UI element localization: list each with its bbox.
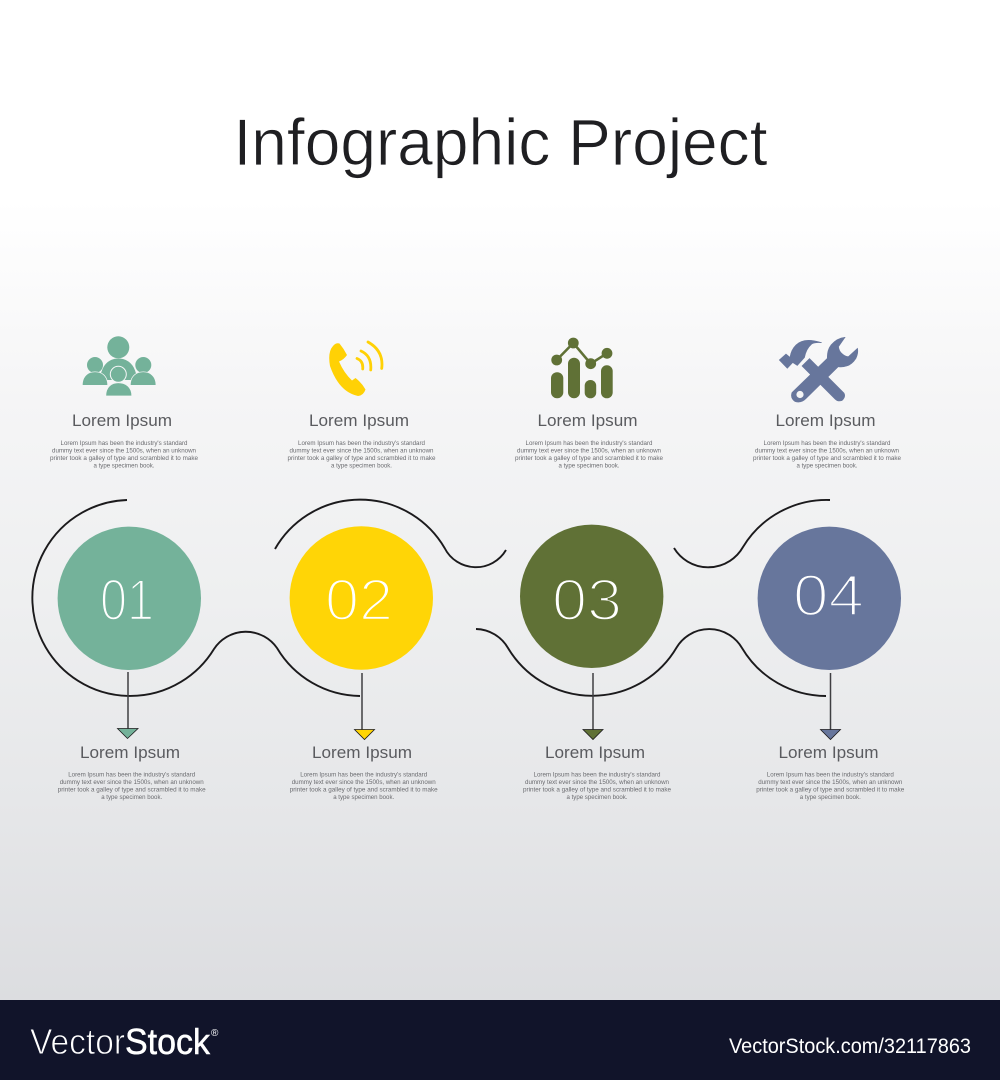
heading and text: top block 4 <box>753 411 901 469</box>
circle 04 <box>758 527 901 670</box>
heading and text: top block 3: a type specimen book. <box>558 462 620 469</box>
heading and text: bottom block 1: printer took a galley of type and scrambled it to make <box>58 787 206 794</box>
heading and text: bottom block 3: Lorem Ipsum <box>545 743 645 762</box>
heading and text: bottom block 2: Lorem Ipsum has been the industry's standard <box>300 771 427 778</box>
arrow 3 <box>583 673 603 740</box>
heading and text: bottom block 2: printer took a galley of type and scrambled it to make <box>290 787 438 794</box>
heading and text: bottom block 3: a type specimen book. <box>566 794 628 801</box>
heading and text: bottom block 4: a type specimen book. <box>800 794 861 801</box>
heading and text: top block 1: printer took a galley of type and scrambled it to make <box>50 455 198 462</box>
heading and text: bottom block 3 <box>523 743 671 801</box>
circle 01 <box>58 527 201 670</box>
heading and text: bottom block 4: printer took a galley of type and scrambled it to make <box>756 787 905 794</box>
circle 04: 04 <box>793 564 864 628</box>
icon: people group <box>82 336 156 396</box>
heading and text: bottom block 4 <box>756 743 905 801</box>
curve: over circle 2 <box>275 500 506 567</box>
heading and text: top block 2: Lorem Ipsum <box>309 411 409 430</box>
circle 03 <box>520 525 663 668</box>
heading and text: bottom block 3: Lorem Ipsum has been the industry's standard <box>534 771 661 778</box>
heading and text: top block 4: printer took a galley of type and scrambled it to make <box>753 455 901 462</box>
heading and text: bottom block 1: dummy text ever since the 1500s, when an unknown <box>60 779 204 786</box>
circle 01: 01 <box>100 568 154 633</box>
heading and text: top block 4: dummy text ever since the 1500s, when an unknown <box>755 447 899 454</box>
heading and text: top block 2: printer took a galley of type and scrambled it to make <box>288 455 436 462</box>
curve: around circle 1 to circle 2 bottom <box>32 500 360 696</box>
arrow 1 <box>118 672 138 738</box>
arrow 2 <box>354 673 374 740</box>
heading and text: top block 3: Lorem Ipsum has been the industry's standard <box>526 440 653 447</box>
icon: phone <box>329 342 382 396</box>
heading and text: top block 1: dummy text ever since the 1500s, when an unknown <box>52 447 196 454</box>
heading and text: top block 2: dummy text ever since the 1500s, when an unknown <box>290 447 434 454</box>
heading and text: bottom block 3: printer took a galley of type and scrambled it to make <box>523 787 671 794</box>
title: Infographic Project <box>234 105 768 179</box>
circle 03: 03 <box>552 568 622 633</box>
heading and text: top block 3: printer took a galley of type and scrambled it to make <box>515 455 663 462</box>
heading and text: bottom block 4: Lorem Ipsum <box>778 743 878 762</box>
footer logo: ® <box>211 1028 219 1039</box>
heading and text: top block 4: a type specimen book. <box>796 462 858 469</box>
heading and text: top block 2 <box>288 411 436 469</box>
circle 02: 02 <box>325 568 393 633</box>
heading and text: bottom block 2: Lorem Ipsum <box>312 743 412 762</box>
footer image id: VectorStock.com/32117863 <box>729 1035 971 1058</box>
icon: bar chart <box>551 338 613 398</box>
heading and text: bottom block 2: dummy text ever since the 1500s, when an unknown <box>292 779 436 786</box>
curve: over to circle 4 <box>674 500 830 567</box>
heading and text: top block 4: Lorem Ipsum <box>776 411 876 430</box>
heading and text: bottom block 3: dummy text ever since the 1500s, when an unknown <box>525 779 669 786</box>
curve: under circle 3 to circle 4 bottom <box>476 629 826 696</box>
heading and text: bottom block 1: a type specimen book. <box>101 794 162 801</box>
footer bar <box>0 1000 1000 1080</box>
footer logo <box>30 1021 219 1062</box>
footer logo: Stock <box>125 1021 211 1062</box>
heading and text: top block 1 <box>50 411 198 469</box>
heading and text: top block 2: a type specimen book. <box>331 462 392 469</box>
heading and text: top block 1: a type specimen book. <box>94 462 155 469</box>
heading and text: top block 3: Lorem Ipsum <box>538 411 638 430</box>
footer logo: Vector <box>30 1021 125 1062</box>
circle 02 <box>290 526 433 670</box>
heading and text: bottom block 1 <box>58 743 206 801</box>
arrow 4 <box>820 673 840 740</box>
heading and text: top block 1: Lorem Ipsum has been the industry's standard <box>60 440 188 447</box>
icon: hammer and wrench <box>779 337 858 402</box>
heading and text: top block 2: Lorem Ipsum has been the industry's standard <box>298 440 425 447</box>
heading and text: bottom block 1: Lorem Ipsum has been the industry's standard <box>68 771 195 778</box>
heading and text: bottom block 1: Lorem Ipsum <box>80 743 180 762</box>
heading and text: bottom block 4: dummy text ever since the 1500s, when an unknown <box>758 779 903 786</box>
heading and text: top block 3: dummy text ever since the 1500s, when an unknown <box>517 447 661 454</box>
heading and text: top block 3 <box>515 411 663 469</box>
heading and text: bottom block 2 <box>290 743 438 801</box>
heading and text: top block 1: Lorem Ipsum <box>72 411 172 430</box>
heading and text: bottom block 2: a type specimen book. <box>333 794 394 801</box>
heading and text: bottom block 4: Lorem Ipsum has been the industry's standard <box>767 771 894 778</box>
heading and text: top block 4: Lorem Ipsum has been the industry's standard <box>764 440 891 447</box>
